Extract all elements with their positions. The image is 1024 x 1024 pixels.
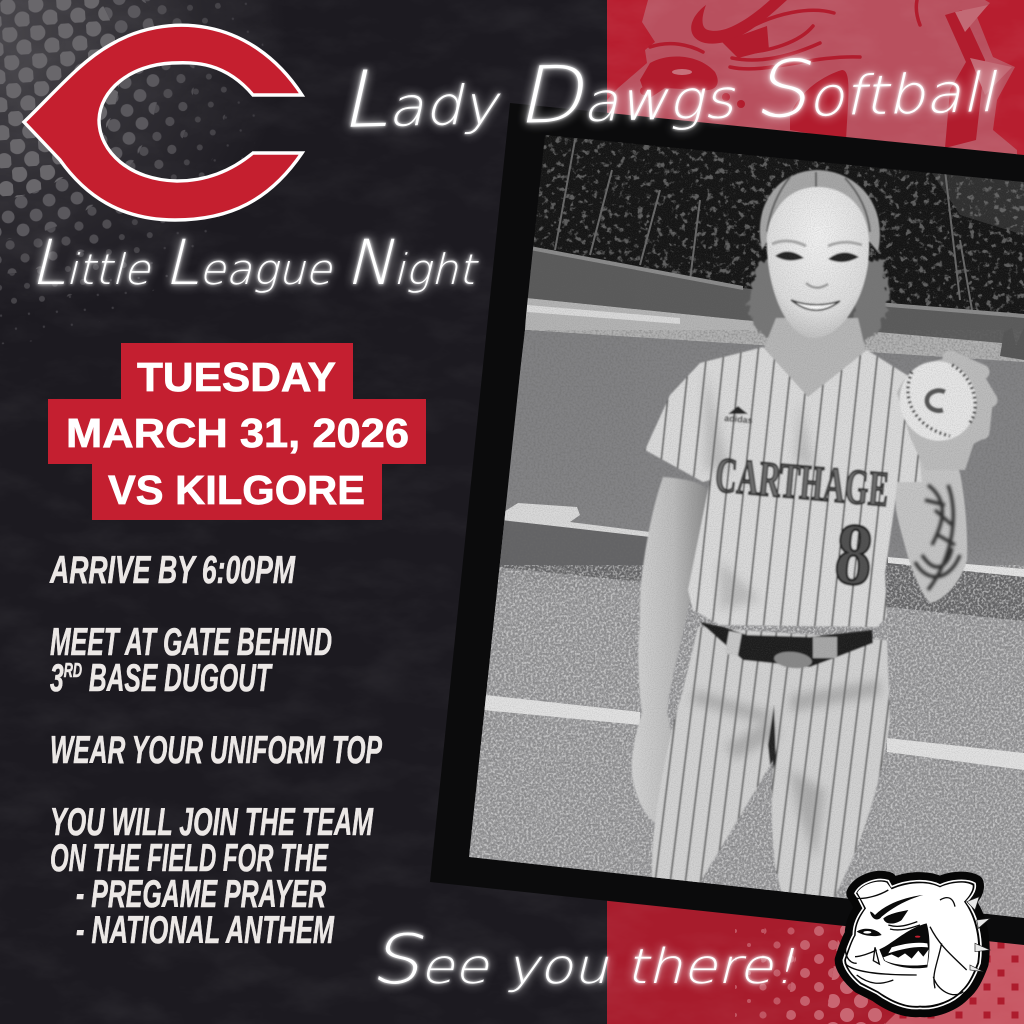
collar spikes (967, 897, 990, 972)
event details text block (49, 549, 383, 952)
red background panel: top right (607, 0, 1024, 170)
warning track (525, 298, 1024, 364)
school logo: red C (24, 25, 302, 220)
script closing: See you there!: See you there! (366, 921, 810, 1000)
photo grain (460, 125, 1024, 925)
event details text block: YOU WILL JOIN THE TEAM (50, 801, 374, 844)
event details text block: WEAR YOUR UNIFORM TOP (50, 729, 383, 772)
brow, eye, nose and mouth (857, 895, 929, 968)
hand (897, 358, 990, 470)
script heading: Little League Night: Little League Night (26, 227, 489, 299)
right forearm with tattoos (895, 440, 967, 603)
event details text block: - PREGAME PRAYER (76, 873, 326, 916)
face (767, 187, 869, 338)
photo frame (430, 103, 1024, 945)
faded bulldog artwork in red panel (607, 0, 1024, 170)
date and opponent banner (48, 343, 426, 520)
trees (524, 135, 1024, 333)
outfield wall (527, 246, 1024, 345)
upper gum (888, 943, 928, 953)
pants (652, 627, 890, 905)
belt (700, 622, 873, 670)
left arm (632, 477, 707, 827)
halftone dots: bottom red (735, 925, 1024, 1024)
player photo (460, 125, 1024, 930)
event details text block: MEET AT GATE BEHIND (50, 621, 332, 664)
jersey number: 8 (831, 505, 877, 605)
jowl and wrinkle lines (845, 890, 967, 995)
player figure (632, 170, 990, 905)
event details text block: ON THE FIELD FOR THE (50, 837, 329, 880)
jersey (645, 347, 922, 627)
snarling teeth (883, 949, 929, 966)
slicked-back hair on top (760, 170, 880, 252)
event details text block: RD (64, 660, 82, 682)
grass field (460, 328, 1024, 930)
bulldog mascot logo (843, 879, 990, 1009)
event details text block: - NATIONAL ANTHEM (76, 909, 335, 952)
event details text block: 3 (50, 657, 72, 700)
softball (899, 360, 978, 442)
facial features (772, 241, 862, 310)
date and opponent banner: TUESDAY (137, 354, 336, 400)
adidas mark: adidas (724, 413, 753, 425)
event details text block: ARRIVE BY 6:00PM (49, 549, 296, 592)
event details text block: BASE DUGOUT (82, 657, 273, 700)
jersey lettering: CARTHAGE (713, 446, 891, 517)
halftone dots: top left (0, 0, 247, 327)
date and opponent banner: VS KILGORE (108, 467, 365, 513)
script heading: Lady Dawgs Softball: Lady Dawgs Softball (336, 38, 1011, 146)
date and opponent banner: MARCH 31, 2026 (66, 410, 409, 456)
curly hair at the sides (745, 255, 885, 342)
red background panel: bottom (607, 890, 1024, 1024)
neck (764, 318, 866, 398)
